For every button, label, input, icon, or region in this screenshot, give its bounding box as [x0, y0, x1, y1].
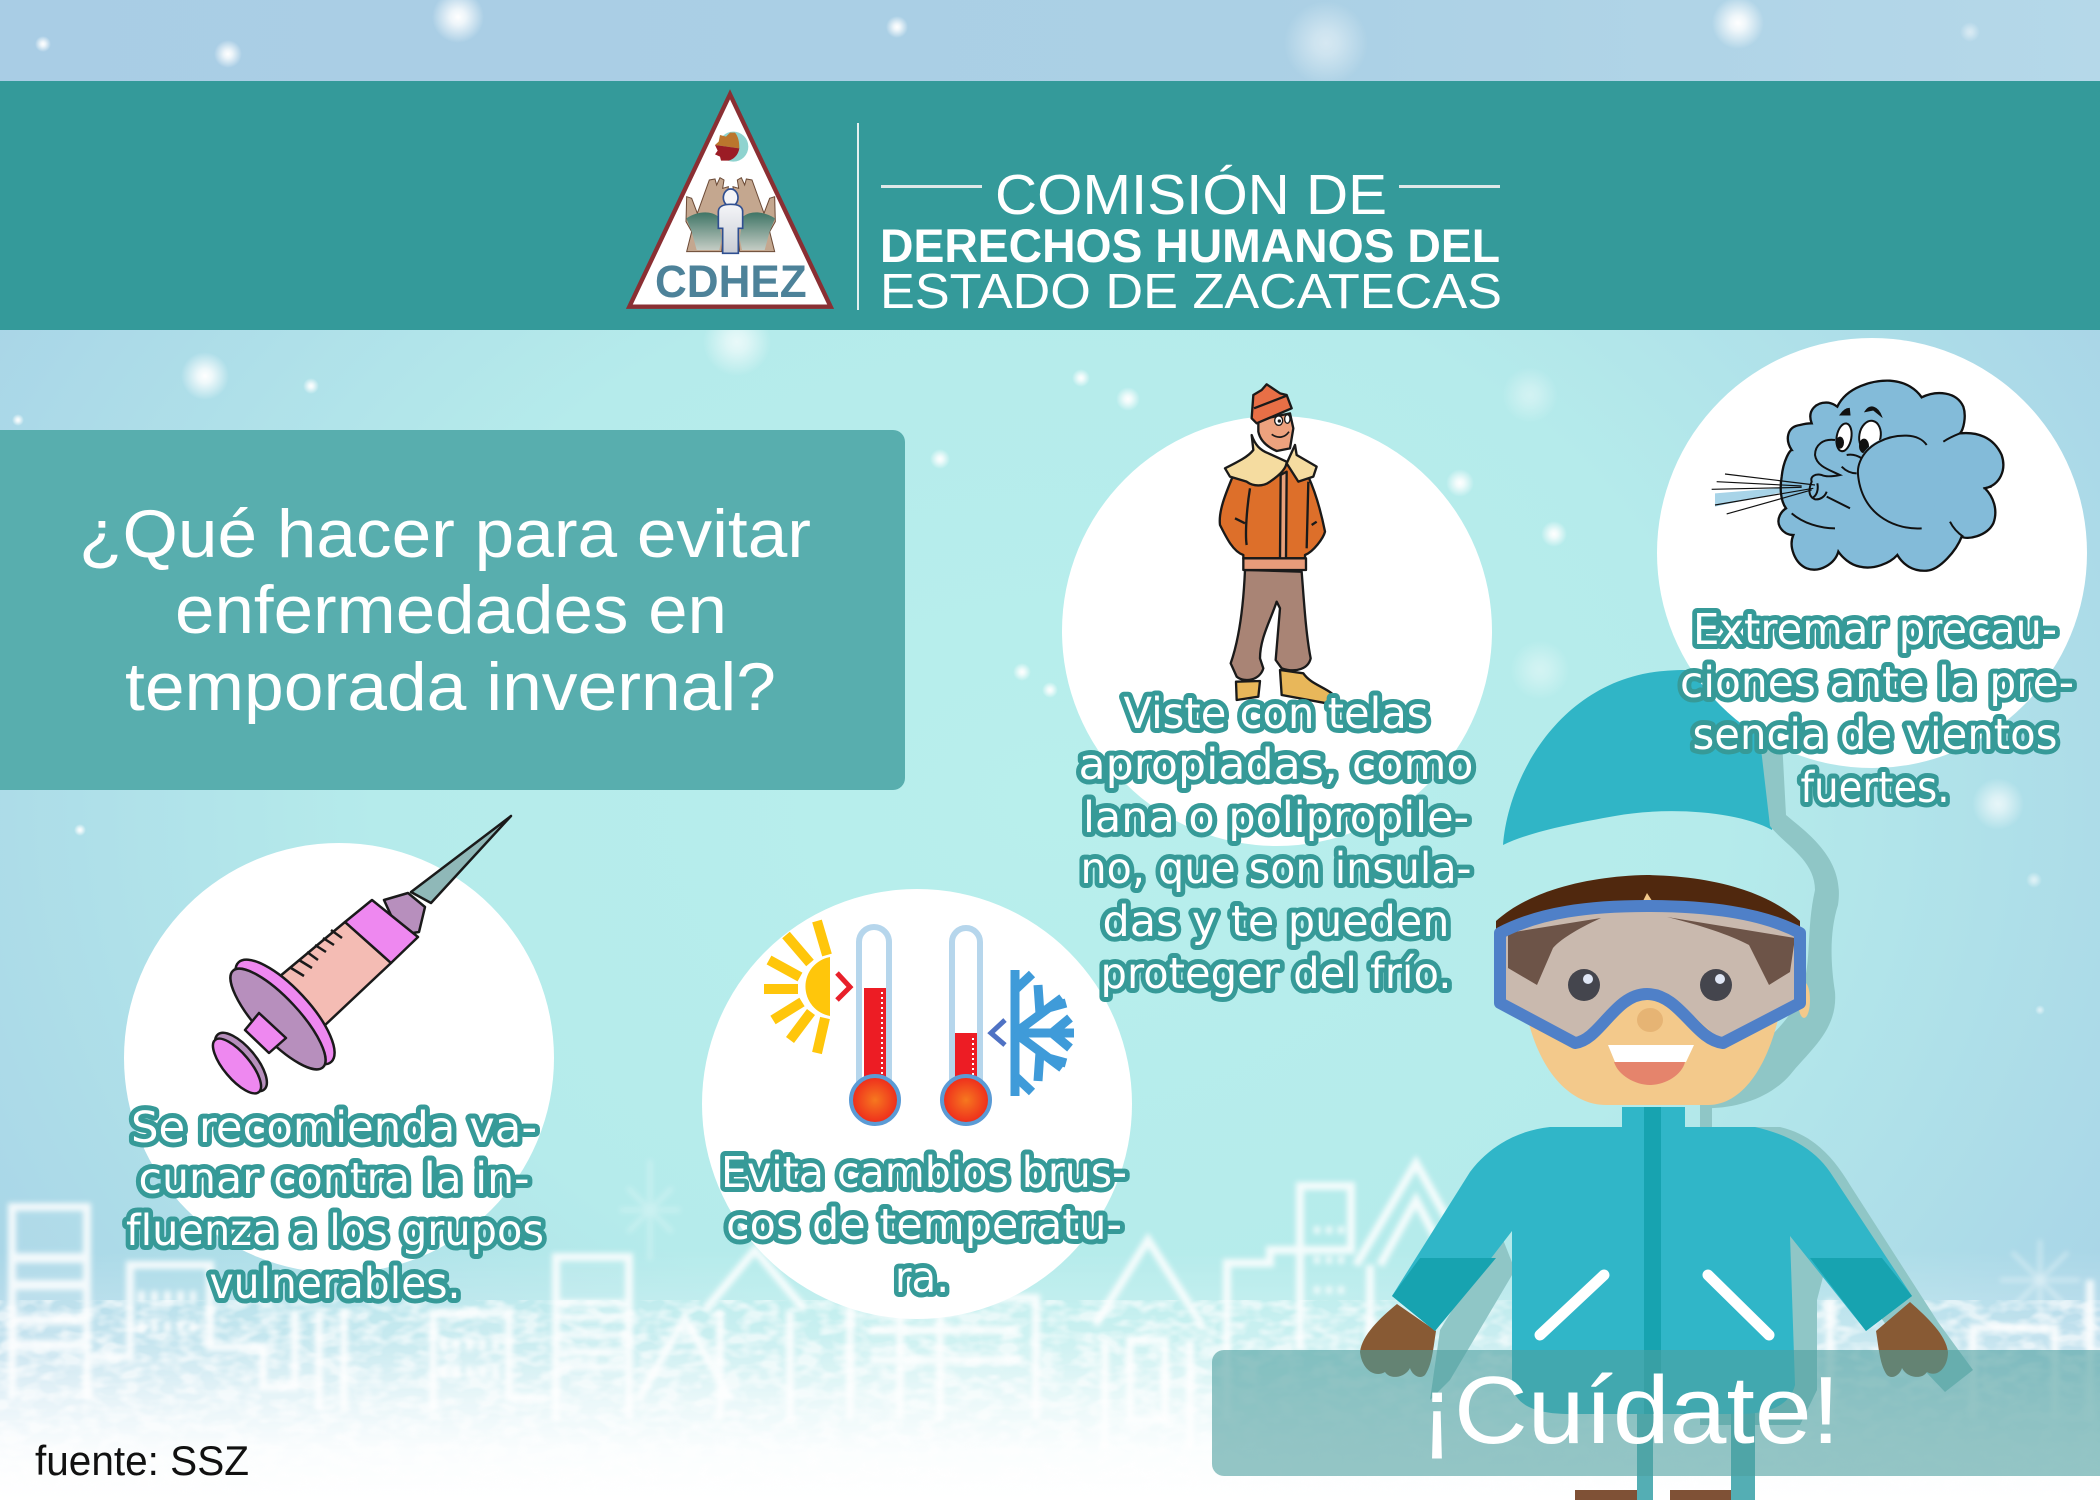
panel: question	[0, 430, 905, 790]
header text	[880, 163, 1502, 319]
question text	[79, 496, 811, 725]
question text: ¿Qué hacer para evitar	[79, 496, 811, 572]
logo wordmark: CDHEZ	[655, 256, 807, 307]
text: ciones ante la pre-	[1680, 658, 2074, 708]
text	[721, 1148, 1127, 1303]
character: boy in winter jacket	[1360, 670, 1973, 1500]
jacket shadow	[1700, 1107, 1973, 1425]
text: das y te pueden	[1102, 897, 1450, 947]
snow glows	[12, 0, 2045, 1015]
text: sencia de vientos	[1692, 710, 2058, 760]
text: ra.	[895, 1253, 949, 1303]
icon: syringe	[205, 816, 511, 1100]
goggle lenses	[1500, 908, 1800, 1040]
card: ropa	[1062, 384, 1492, 999]
text: Extremar precau-	[1693, 605, 2057, 655]
text	[1078, 689, 1474, 999]
head	[1524, 1000, 1782, 1105]
icon: man in coat	[1220, 384, 1332, 703]
goggle frame	[1500, 906, 1800, 1043]
text: cos de temperatu-	[726, 1200, 1122, 1250]
header band	[0, 81, 2100, 330]
text: apropiadas, como	[1078, 740, 1474, 790]
card: vientos	[1657, 338, 2087, 813]
icon: snowflake	[991, 970, 1074, 1096]
hood shadow	[1700, 740, 1839, 1108]
text: Se recomienda va-	[131, 1103, 537, 1153]
header text: DERECHOS HUMANOS DEL	[880, 219, 1500, 272]
header text: COMISIÓN DE	[995, 163, 1387, 227]
question text: enfermedades en	[175, 572, 727, 648]
text	[126, 1103, 544, 1309]
logo CDHEZ	[629, 94, 831, 307]
icon: blowing cloud	[1712, 381, 2003, 571]
icon: thermometers	[851, 927, 990, 1124]
mouth	[1608, 1045, 1694, 1062]
icon: sun	[764, 921, 850, 1053]
card: vacunacion	[124, 816, 554, 1309]
question text: temporada invernal?	[125, 649, 776, 725]
text: vulnerables.	[210, 1259, 460, 1309]
text: lana o polipropile-	[1083, 793, 1469, 843]
source: fuente: SSZ	[35, 1437, 249, 1484]
legs	[1637, 1405, 1755, 1500]
banner text: ¡Cuídate!	[1420, 1357, 1840, 1464]
eyes	[1568, 969, 1600, 1001]
text: fuertes.	[1800, 763, 1950, 813]
banner: Cuídate	[1212, 1350, 2100, 1476]
text: Evita cambios brus-	[721, 1148, 1127, 1198]
snow city skyline	[12, 1160, 2090, 1450]
jacket	[1392, 1107, 1912, 1414]
hood	[1503, 670, 1790, 845]
text: Viste con telas	[1124, 689, 1428, 739]
text	[1680, 605, 2074, 813]
text: fluenza a los grupos	[126, 1206, 544, 1256]
gloves	[1360, 1304, 1436, 1377]
header text: ESTADO DE ZACATECAS	[880, 265, 1502, 319]
text: cunar contra la in-	[138, 1154, 530, 1204]
text: no, que son insula-	[1080, 844, 1472, 894]
card: temperatura	[702, 889, 1132, 1319]
text: proteger del frío.	[1100, 949, 1452, 999]
